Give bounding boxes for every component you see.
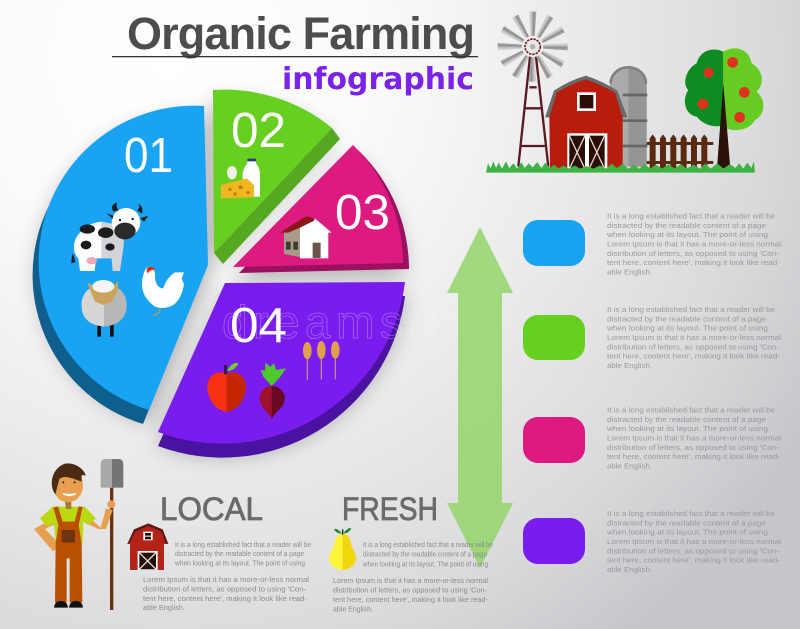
icon: farmer with shovel (34, 459, 123, 610)
text block 4: when looking at its layout. The point of using (606, 528, 768, 537)
text: local: It is a long established fact that a reader will be (175, 540, 311, 549)
text block 4: distracted by the readable content of a page (607, 518, 766, 527)
pie shadow (39, 102, 405, 456)
text block 4: tent here, content here', making it look like read- (607, 556, 780, 565)
icon: apple tree (685, 48, 763, 168)
text block 1: able English. (607, 268, 652, 276)
text block 1: distribution of letters, as opposed to using 'Con- (607, 249, 779, 258)
text: local: able English. (143, 603, 185, 612)
text block 2: Lorem Ipsum is that it has a more-or-less normal (607, 333, 781, 342)
text block 4: able English. (607, 565, 652, 574)
slice 03 magenta: 03 (335, 186, 390, 240)
text: fresh: distracted by the readable content of a page (363, 550, 487, 558)
icon: beet (260, 363, 286, 419)
text block 3: when looking at its layout. The point of using (606, 424, 768, 433)
text block 1: Lorem Ipsum is that it has a more-or-less normal (607, 240, 781, 248)
legend swatch purple (523, 518, 585, 564)
icon: sheep (82, 280, 127, 337)
text block 2: when looking at its layout. The point of using (606, 324, 768, 333)
text: local: distracted by the readable content of a page (175, 549, 304, 558)
icon: fence (647, 134, 713, 170)
text block 3: tent here, content here', making it look like read- (607, 452, 780, 461)
legend swatch blue (523, 220, 585, 266)
pie chart (33, 90, 409, 458)
text block 1: when looking at its layout. The point of using (606, 230, 768, 239)
icon: hen (142, 267, 184, 316)
text: local: distribution of letters, as opposed to using 'Con- (143, 584, 306, 594)
text: fresh: distribution of letters, as opposed to using 'Con- (333, 586, 487, 594)
icon: cow (72, 202, 148, 271)
text: fresh: when looking at its layout. The point of using (362, 560, 488, 568)
icon: barn (545, 76, 627, 170)
text: fresh: It is a long established fact that a reader will be (363, 540, 493, 549)
icon: silo (610, 67, 647, 167)
icon: windmill (498, 12, 568, 167)
slice 01 animals (72, 202, 184, 337)
legend swatch green (523, 315, 585, 360)
text: fresh: tent here, content here', making it look like read- (333, 595, 488, 604)
text block 1 (606, 212, 781, 276)
text block 1: tent here, content here', making it look like read- (607, 258, 780, 267)
slice 04 purple: 04 (230, 299, 287, 353)
text block 2: distracted by the readable content of a page (607, 314, 766, 323)
slice 04 purple (158, 282, 405, 458)
icon: house (280, 216, 332, 258)
text block 3 (606, 406, 781, 470)
text: fresh: able English. (333, 604, 373, 614)
icon: apple (207, 363, 246, 412)
text block 3: Lorem Ipsum is that it has a more-or-less normal (607, 434, 781, 442)
text block 3: It is a long established fact that a reader will be (607, 406, 775, 414)
text block 4 (606, 509, 781, 574)
title: infographic (282, 62, 474, 97)
text block 2: distribution of letters, as opposed to using 'Con- (607, 342, 779, 351)
heading: local: LOCAL (160, 491, 263, 527)
slice 01 blue (33, 106, 208, 424)
icon: grass (486, 161, 755, 173)
text block 1: It is a long established fact that a reader will be (607, 212, 775, 220)
icon: milk, egg and cheese (221, 159, 260, 198)
text: local: tent here, content here', making it look like read- (143, 594, 307, 603)
slice 02 green (213, 90, 340, 264)
text block 1: distracted by the readable content of a page (607, 221, 766, 230)
bottom icons (127, 523, 356, 570)
text block 4: It is a long established fact that a reader will be (607, 509, 775, 518)
text block 3: able English. (607, 462, 652, 470)
text: fresh: Lorem Ipsum is that it has a more-or-less normal (333, 576, 488, 585)
icon: wheat (303, 341, 340, 380)
title (112, 8, 478, 97)
farm scene (486, 12, 763, 173)
text block 3: distracted by the readable content of a page (607, 415, 766, 424)
text: local (143, 540, 311, 612)
text block 3: distribution of letters, as opposed to using 'Con- (607, 443, 779, 452)
text block 2 (606, 305, 781, 370)
title: Organic Farming (127, 8, 475, 59)
text block 2: It is a long established fact that a reader will be (607, 305, 775, 314)
text block 2: tent here, content here', making it look like read- (607, 352, 780, 361)
slice 02 green: 02 (231, 104, 286, 158)
heading: fresh: FRESH (342, 491, 438, 527)
text: local: when looking at its layout. The point of using (174, 558, 305, 568)
legend swatch magenta (523, 417, 585, 463)
slice 03 magenta (233, 145, 409, 273)
icon: pear (329, 528, 356, 570)
text block 4: Lorem Ipsum is that it has a more-or-less normal (607, 537, 781, 546)
text: fresh (333, 540, 493, 614)
up-down arrow (447, 227, 513, 568)
watermark: dreamstime (222, 296, 512, 348)
text block 4: distribution of letters, as opposed to using 'Con- (607, 546, 779, 555)
slice 01 blue: 01 (124, 129, 173, 183)
pie icons (207, 159, 340, 419)
icon: small barn (127, 523, 168, 570)
text block 2: able English. (607, 361, 652, 370)
text: local: Lorem Ipsum is that it has a more-or-less normal (143, 575, 309, 584)
